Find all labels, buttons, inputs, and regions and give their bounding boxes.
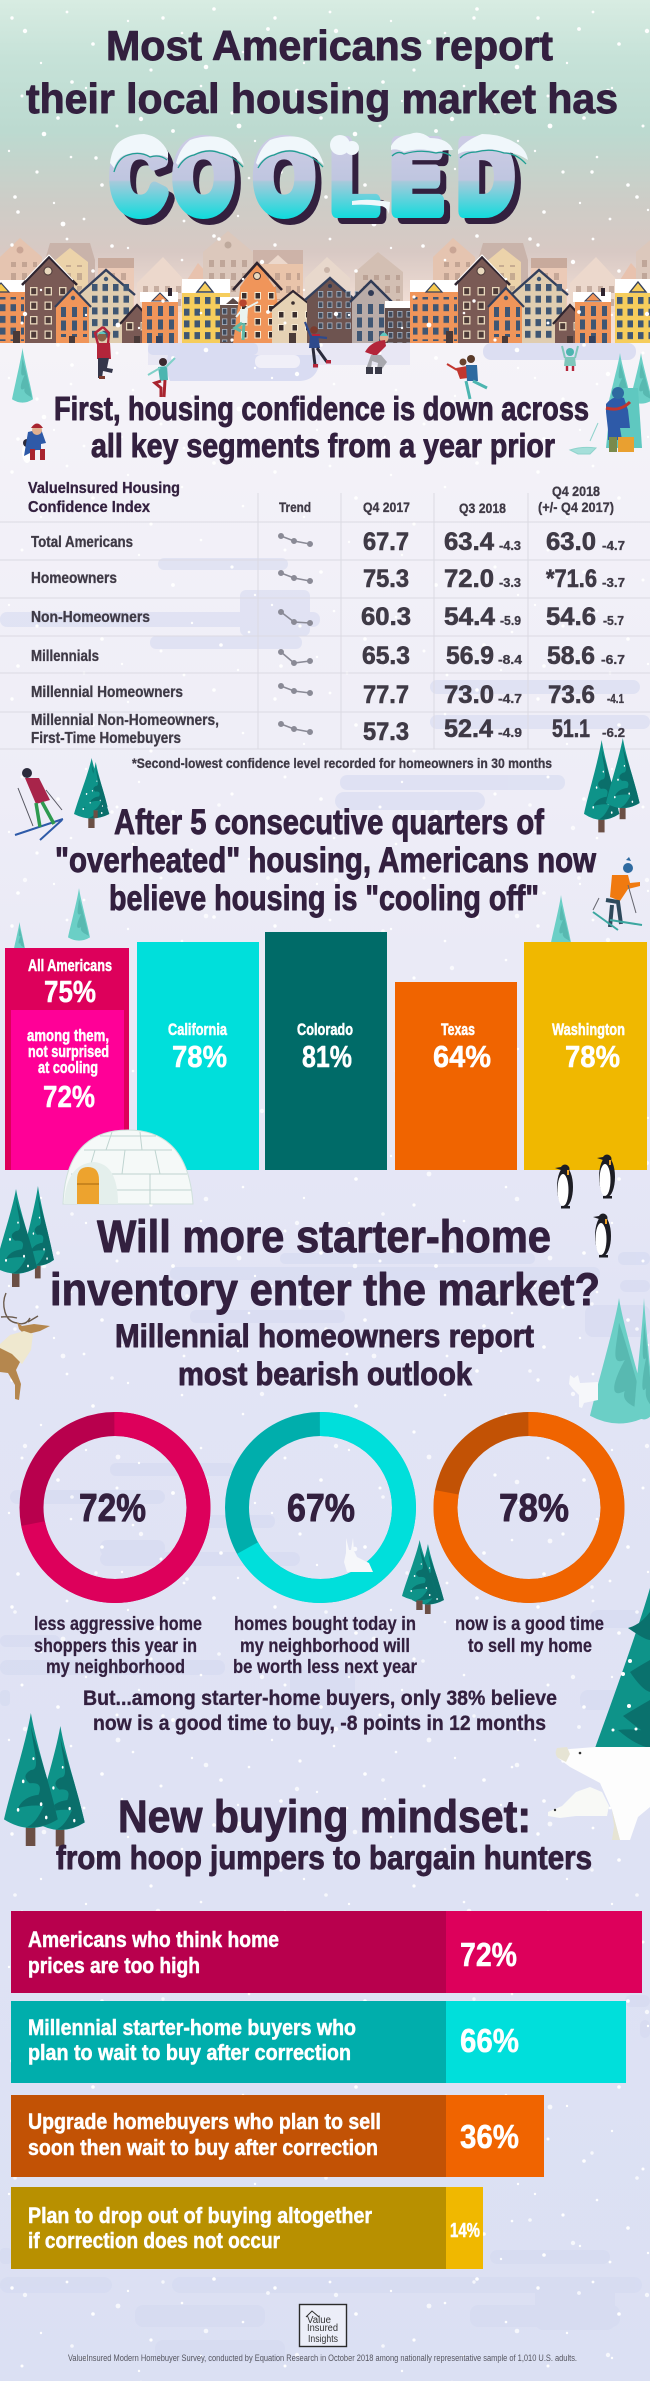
bar: 66% wait to buy after correction: plan to wait to buy after correction — [28, 2040, 351, 2065]
row: Millennial Homeowners: -4.1 — [607, 691, 624, 706]
bar: 14% drop out of buying: Plan to drop out of buying altogether — [28, 2203, 372, 2228]
logo: Value Insured Insights: Insured — [307, 2323, 338, 2334]
inner bar: not surprised at cooling: 72% — [43, 1079, 95, 1114]
skier: right orange — [593, 857, 642, 930]
title — [26, 22, 618, 122]
skater: dancer — [235, 299, 258, 340]
row: Total Americans: -4.7 — [602, 538, 625, 553]
row: Total Americans: 63.4 — [444, 528, 494, 556]
small tree between donuts — [402, 1540, 444, 1614]
row: Total Americans: 63.0 — [546, 528, 596, 556]
table footnote: *Second-lowest confidence level recorded for homeowners in 30 months — [132, 755, 552, 771]
figure: child with penguin — [22, 424, 46, 463]
row: Millennials — [31, 642, 625, 670]
bar: Texas — [395, 982, 517, 1170]
bar: Texas: Texas — [441, 1020, 475, 1039]
title word: COOLED: COOLED — [111, 121, 513, 233]
table header: Confidence Index — [28, 499, 150, 516]
row: Millennials: 58.6 — [547, 642, 595, 670]
bar: 14% drop out of buying: if correction does not occur — [28, 2228, 280, 2253]
inner bar: not surprised at cooling: among them, — [27, 1026, 109, 1045]
grid lines — [0, 493, 650, 749]
donut: 72% less aggressive home shoppers — [32, 1424, 202, 1678]
row: Millennial Homeowners: Millennial Homeowners — [31, 684, 183, 701]
bar: 36% upgrade homebuyers: soon then wait to buy after correction — [28, 2135, 378, 2160]
light trees on rink — [12, 348, 650, 404]
trees: left lower — [4, 1713, 85, 1846]
skater: navy — [305, 322, 331, 368]
title: their local housing market has — [26, 75, 618, 122]
inner bar: not surprised at cooling: at cooling — [38, 1058, 98, 1077]
town of houses — [0, 231, 650, 348]
section heading: housing confidence — [54, 390, 589, 464]
row: Total Americans: 67.7 — [363, 528, 409, 556]
section heading: cooling off — [55, 803, 597, 918]
row: Millennial Homeowners — [31, 681, 624, 709]
donut: 78% good time to sell — [446, 1424, 612, 1657]
title word: COOLED: COOLED — [117, 127, 519, 239]
section heading: starter-home inventory: most bearish outlook — [178, 1356, 472, 1392]
skater: red sweater — [95, 327, 113, 379]
row: Homeowners: 75.3 — [363, 565, 409, 593]
skaters: couple — [447, 355, 487, 399]
callout: starter-home buyers: now is a good time to buy, -8 points in 12 months — [93, 1712, 546, 1735]
title: Most Americans report — [106, 22, 553, 69]
row: Millennial Homeowners: 77.7 — [363, 681, 409, 709]
section heading: new buying mindset: New buying mindset: — [118, 1791, 531, 1842]
row: Non-Homeowners: 54.6 — [546, 603, 596, 631]
arctic fox — [569, 1375, 598, 1408]
section heading: cooling off: believe housing is "cooling off" — [109, 879, 539, 918]
tree: right big — [595, 1588, 650, 1748]
table header: Q4 2018 — [552, 484, 600, 499]
donut: 78% good time to sell: to sell my home — [468, 1635, 592, 1657]
logo: Value Insured Insights: Value — [307, 2315, 331, 2326]
row: Non-Homeowners: 60.3 — [361, 603, 411, 631]
bar: Texas: 64% — [433, 1039, 491, 1074]
row: Non-Homeowners: -5.7 — [603, 613, 624, 628]
row: Homeowners: *71.6 — [546, 565, 597, 593]
logo: Value Insured Insights — [300, 2304, 346, 2346]
bar: 14% drop out of buying: 14% — [450, 2220, 480, 2242]
row: Non-Homeowners — [31, 603, 624, 631]
table header: Q3 2018 — [459, 501, 506, 516]
donut: 72% less aggressive home shoppers: 72% — [79, 1487, 146, 1530]
section heading: starter-home inventory — [50, 1211, 600, 1392]
skier: left red — [15, 768, 63, 840]
bar: Colorado: Colorado — [297, 1020, 353, 1039]
donut: 72% less aggressive home shoppers: my neighborhood — [46, 1656, 185, 1678]
donut: 67% homes worth less next year: homes bought today in — [234, 1613, 416, 1635]
bar: All Americans: 75% — [44, 974, 96, 1009]
row: Millennials: -8.4 — [498, 652, 523, 667]
row: Millennial Non-Homeowners — [31, 712, 625, 747]
bar: California: California — [168, 1020, 227, 1039]
row: Millennials: 65.3 — [362, 642, 410, 670]
skater: child — [562, 346, 578, 371]
row: Millennial Homeowners: 73.6 — [548, 681, 595, 709]
light trees above bars — [14, 888, 571, 950]
ice rink — [148, 343, 636, 381]
inner bar: not surprised at cooling — [11, 1010, 124, 1170]
donut: 72% less aggressive home shoppers: shoppers this year in — [34, 1635, 197, 1657]
row: Non-Homeowners: 54.4 — [444, 603, 495, 631]
bar: All Americans: All Americans — [28, 956, 112, 975]
inner bar: not surprised at cooling: not surprised — [28, 1042, 109, 1061]
section heading: starter-home inventory: inventory enter the market? — [50, 1264, 600, 1315]
polar bears — [548, 1747, 650, 1840]
bar: 72% prices too high: Americans who think home — [28, 1927, 279, 1952]
row: Millennial Non-Homeowners: 52.4 — [444, 715, 493, 743]
bar: Colorado — [265, 932, 387, 1170]
donut: 78% good time to sell: 78% — [499, 1487, 569, 1530]
row: Millennial Homeowners: -4.7 — [498, 691, 522, 706]
bar: 36% upgrade homebuyers — [11, 2095, 544, 2177]
bar chart: cooling by market — [5, 932, 647, 1170]
row: Millennial Non-Homeowners: -6.2 — [602, 725, 625, 740]
bar: 72% prices too high: 72% — [460, 1936, 517, 1973]
section heading: new buying mindset — [56, 1791, 592, 1876]
logo: Value Insured Insights: Insights — [308, 2334, 338, 2345]
row: Homeowners: -3.7 — [602, 575, 625, 590]
row: Millennial Non-Homeowners: Millennial Non-Homeowners, — [31, 712, 219, 729]
skater: crouching red — [365, 332, 388, 374]
bar: 36% upgrade homebuyers: 36% — [460, 2118, 519, 2155]
row: Millennial Non-Homeowners: First-Time Homebuyers — [31, 730, 181, 747]
table: housing confidence index — [0, 480, 650, 771]
donut: 78% good time to sell: now is a good time — [455, 1613, 604, 1635]
callout: starter-home buyers: But...among starter-home buyers, only 38% believe — [83, 1687, 557, 1710]
bar: 72% prices too high — [11, 1911, 642, 1993]
bar: 66% wait to buy after correction — [11, 2001, 626, 2083]
bar: 72% prices too high: prices are too high — [28, 1953, 200, 1978]
penguins — [555, 1154, 615, 1258]
donut: 67% homes worth less next year — [233, 1424, 417, 1678]
snow caps — [110, 133, 528, 214]
row: Total Americans: Total Americans — [31, 534, 133, 551]
row: Millennials: 56.9 — [446, 642, 494, 670]
table header: Q4 2017 — [363, 500, 410, 515]
bar: Washington: Washington — [552, 1020, 625, 1039]
section heading: new buying mindset: from hoop jumpers to bargain hunters — [56, 1839, 592, 1876]
bar: Colorado: 81% — [302, 1039, 352, 1074]
section heading: cooling off: After 5 consecutive quarters of — [114, 803, 544, 842]
light tree and arctic fox — [569, 1298, 650, 1424]
row: Non-Homeowners: -5.9 — [500, 613, 521, 628]
row: Millennial Homeowners: 73.0 — [444, 681, 494, 709]
rabbit — [344, 1538, 373, 1572]
table header: ValueInsured Housing — [28, 480, 180, 497]
section heading: starter-home inventory: Will more starter-home — [97, 1211, 551, 1262]
trees: left upper — [0, 1186, 54, 1287]
bar: California: 78% — [172, 1039, 227, 1074]
row: Total Americans: -4.3 — [499, 538, 521, 553]
row: Homeowners: -3.3 — [499, 575, 521, 590]
bar: 36% upgrade homebuyers: Upgrade homebuyers who plan to sell — [28, 2109, 381, 2134]
row: Non-Homeowners: Non-Homeowners — [31, 609, 150, 626]
bar: Washington: 78% — [565, 1039, 620, 1074]
bar: 66% wait to buy after correction: Millennial starter-home buyers who — [28, 2015, 356, 2040]
callout: starter-home buyers — [83, 1687, 557, 1735]
trees beside skiers — [74, 738, 640, 832]
row: Homeowners: 72.0 — [444, 565, 494, 593]
donut: 67% homes worth less next year: be worth less next year — [233, 1656, 417, 1678]
section heading: housing confidence: all key segments from a year prior — [91, 427, 555, 464]
bar: Washington — [524, 942, 647, 1170]
section heading: starter-home inventory: Millennial homeowners report — [115, 1318, 534, 1354]
bar: All Americans — [5, 948, 129, 1170]
igloo — [63, 1130, 193, 1204]
row: Homeowners: Homeowners — [31, 570, 117, 587]
donut: 67% homes worth less next year: my neighborhood will — [240, 1635, 410, 1657]
table header: Trend — [279, 500, 311, 515]
table header: (+/- Q4 2017) — [538, 500, 614, 515]
table header — [28, 480, 614, 516]
row: Millennial Non-Homeowners: -4.9 — [498, 725, 522, 740]
row: Millennial Non-Homeowners: 51.1 — [552, 715, 590, 743]
bar: California — [137, 942, 259, 1170]
row: Millennials: Millennials — [31, 648, 99, 665]
skaters — [95, 299, 578, 399]
skater: teal — [148, 358, 175, 397]
deer — [0, 1293, 50, 1400]
row: Homeowners — [31, 565, 625, 593]
bar: 14% drop out of buying — [11, 2187, 483, 2269]
bar: 66% wait to buy after correction: 66% — [460, 2022, 519, 2059]
donut: 67% homes worth less next year: 67% — [287, 1487, 355, 1530]
row: Millennial Non-Homeowners: 57.3 — [363, 718, 409, 746]
row: Total Americans — [31, 528, 625, 556]
figure: ice fisher — [570, 387, 642, 454]
row: Millennials: -6.7 — [601, 652, 625, 667]
donut: 72% less aggressive home shoppers: less aggressive home — [34, 1613, 202, 1635]
